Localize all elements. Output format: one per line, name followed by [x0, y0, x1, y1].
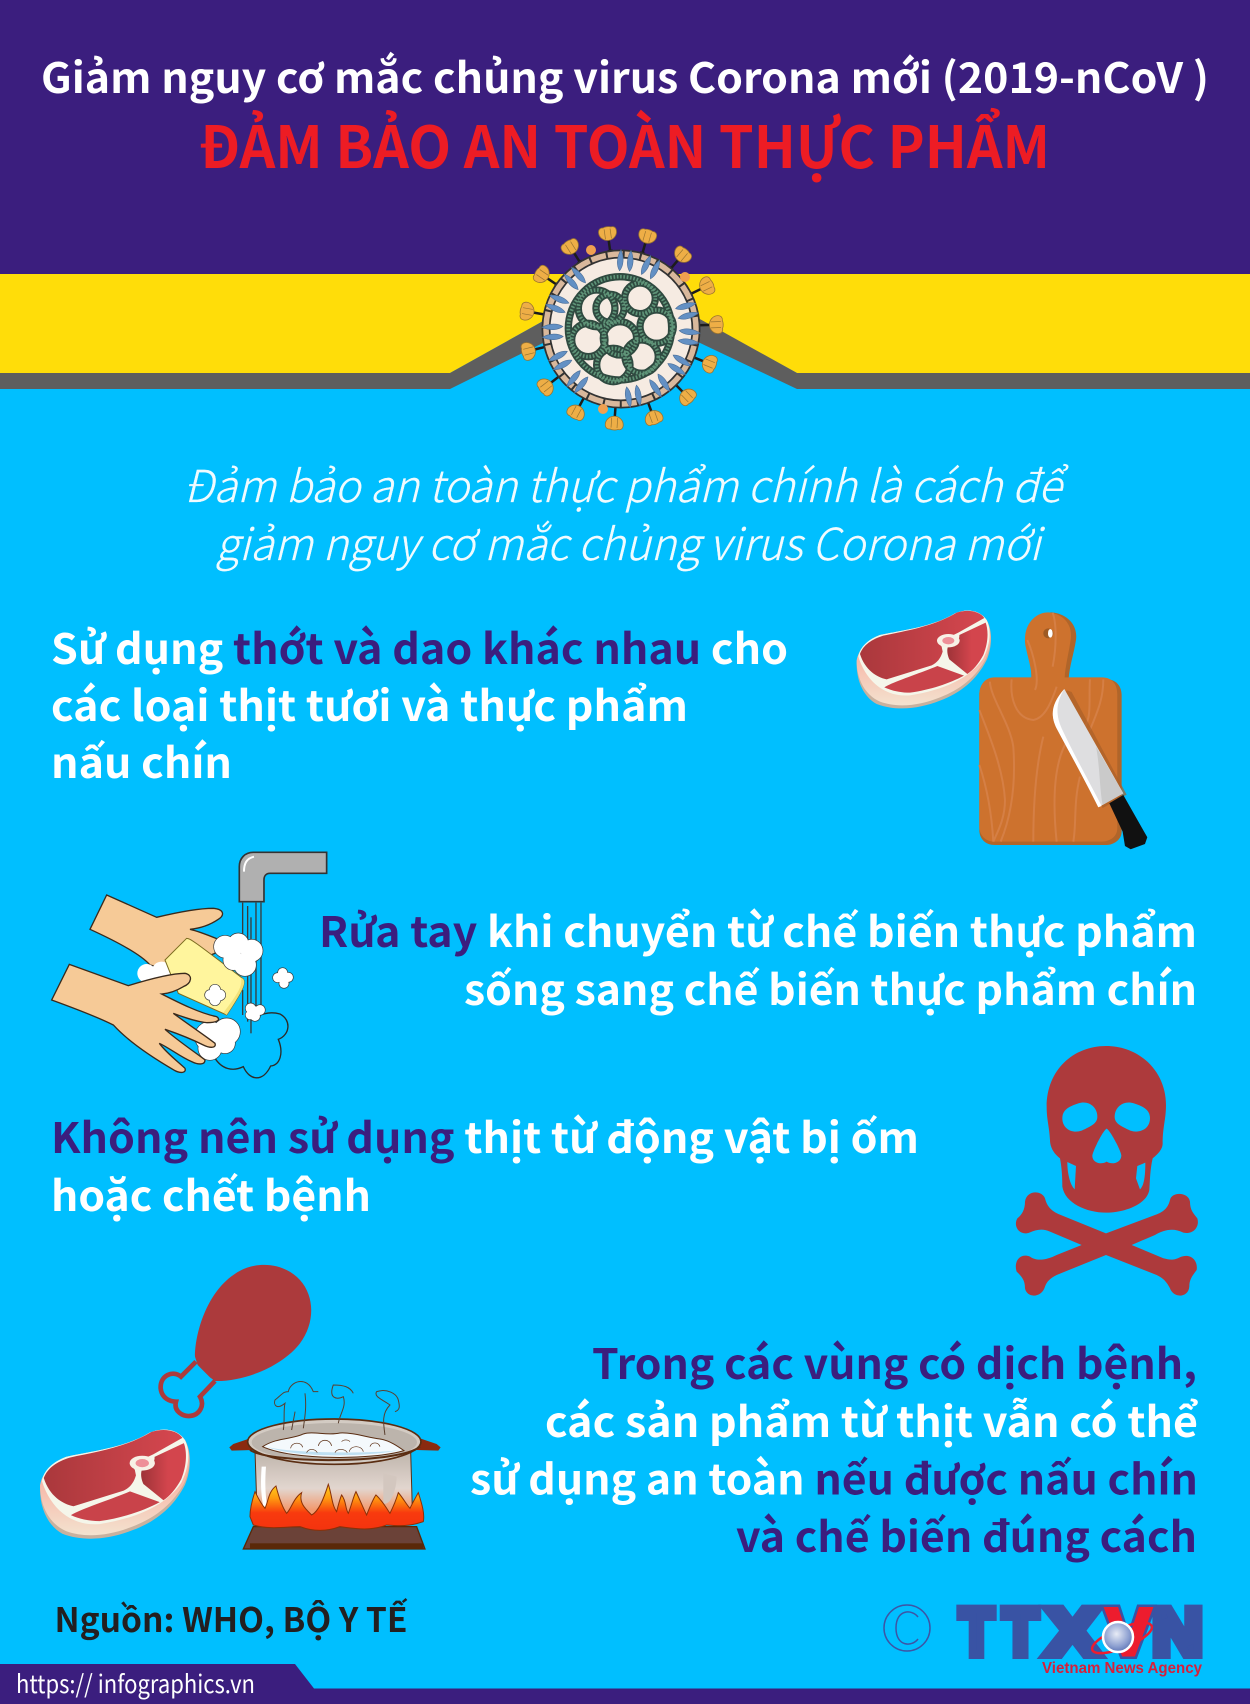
icon: boiling pot on fire — [229, 1382, 441, 1549]
tip 3 text: sick animals — [51, 1105, 919, 1224]
logo: TTXVN: T — [960, 1594, 994, 1668]
tip 1 text: chopping boards: nấu chín — [51, 730, 232, 791]
tip 1 text: chopping boards: các loại thịt tươi và thực phẩm — [51, 673, 688, 734]
tip 2 text: hand washing — [319, 899, 1197, 1018]
intro text: Đảm bảo an toàn thực phẩm chính là cách để — [184, 451, 1070, 515]
logo: TTXVN: N — [1152, 1594, 1202, 1668]
header band: yellow stripe with grey chevron — [0, 274, 1250, 389]
icon: cutting board and knife — [979, 612, 1147, 849]
title: line 2: ĐẢM BẢO AN TOÀN THỰC PHẨM — [199, 101, 1050, 185]
tip 3 text: sick animals: Không nên sử dụng thịt từ động vật bị ốm — [51, 1105, 919, 1166]
tip 4 text: cooked meat: sử dụng an toàn nếu được nấu chín — [470, 1446, 1198, 1508]
tip 1 text: chopping boards: Sử dụng thớt và dao khác nhau cho — [51, 616, 788, 677]
icon: raw steak — [857, 611, 991, 708]
icon: skull and crossbones — [1016, 1046, 1198, 1296]
footer bar — [0, 1664, 1250, 1704]
footer url: https:// infographics.vn — [16, 1665, 255, 1701]
icon: chicken drumstick — [161, 1265, 311, 1416]
tip 4 text: cooked meat — [470, 1331, 1199, 1565]
tip 4 text: cooked meat: các sản phẩm từ thịt vẫn có thể — [545, 1389, 1199, 1450]
icon: hands washing under tap — [52, 852, 327, 1078]
icon: coronavirus — [519, 225, 724, 431]
title: line 1: Giảm nguy cơ mắc chủng virus Corona mới (2019-nCoV ) — [41, 45, 1209, 106]
tip 1 text: chopping boards — [51, 616, 788, 791]
copyright symbol — [884, 1605, 930, 1651]
tip 2 text: hand washing: Rửa tay khi chuyển từ chế biến thực phẩm — [319, 899, 1197, 960]
icon: raw steak 2 — [40, 1430, 190, 1539]
logo: TTXVN: T — [1003, 1594, 1038, 1668]
source credit: Nguồn: WHO, BỘ Y TẾ — [54, 1593, 408, 1642]
header band: purple — [0, 0, 1250, 274]
intro text — [184, 451, 1070, 573]
logo: TTXVN: V — [1106, 1594, 1151, 1668]
logo: TTXVN: Vietnam News Agency — [1042, 1660, 1202, 1677]
logo: TTXVN — [960, 1594, 1202, 1677]
logo: TTXVN: V — [1106, 1594, 1151, 1668]
intro text: giảm nguy cơ mắc chủng virus Corona mới — [216, 509, 1045, 573]
logo: TTXVN: X — [1046, 1594, 1099, 1668]
tip 3 text: sick animals: hoặc chết bệnh — [51, 1163, 371, 1224]
tip 2 text: hand washing: sống sang chế biến thực phẩm chín — [464, 957, 1197, 1018]
tip 4 text: cooked meat: và chế biến đúng cách — [736, 1504, 1197, 1565]
tip 4 text: cooked meat: Trong các vùng có dịch bệnh, — [592, 1331, 1197, 1392]
